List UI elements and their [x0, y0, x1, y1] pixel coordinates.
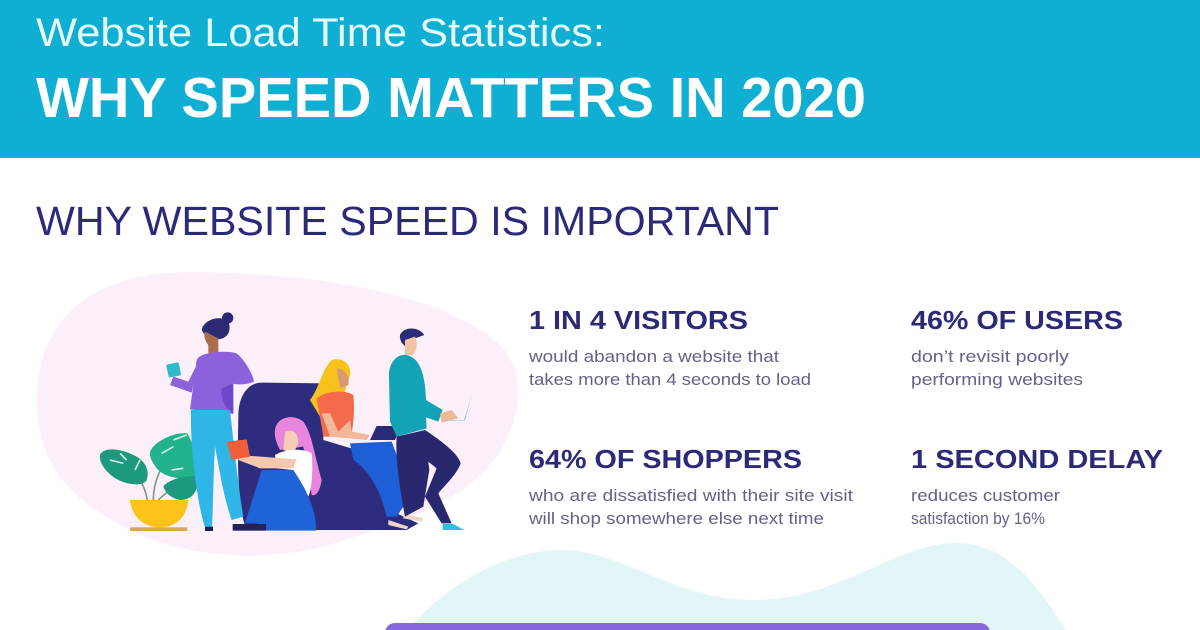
man with laptop: [389, 328, 472, 530]
stat: 1 second delay: reduces customer: [911, 486, 1060, 505]
title line 1: Website Load Time Statistics:: [36, 11, 605, 55]
sofa: [238, 383, 418, 530]
woman with laptop: [310, 359, 423, 529]
standing woman: [166, 312, 254, 531]
stat: 46% of users: performing websites: [911, 370, 1083, 389]
stat: 64% of shoppers: [528, 444, 853, 528]
pink background blob: [37, 272, 518, 555]
stat: 46% of users: 46% OF USERS: [911, 305, 1123, 335]
stat: 1 second delay: 1 SECOND DELAY: [911, 444, 1163, 474]
stat: 1 in 4 visitors: takes more than 4 seconds to load: [529, 370, 811, 389]
stat: 46% of users: don’t revisit poorly: [911, 347, 1070, 366]
title line 2: WHY SPEED MATTERS IN 2020: [36, 66, 866, 130]
seated woman with tablet: [227, 417, 322, 531]
stat: 64% of shoppers: who are dissatisfied with their site visit: [528, 486, 853, 505]
section heading: WHY WEBSITE SPEED IS IMPORTANT: [36, 198, 779, 244]
illustration: people with sofa and plant: [100, 312, 472, 531]
stat: 46% of users: [911, 305, 1123, 389]
stat: 1 in 4 visitors: would abandon a website that: [528, 347, 779, 366]
stat: 1 in 4 visitors: 1 IN 4 VISITORS: [529, 305, 748, 335]
teal background wave: [408, 543, 1066, 630]
stat: 1 in 4 visitors: [528, 305, 811, 389]
stat: 1 second delay: [911, 444, 1163, 528]
header banner: [0, 0, 1200, 158]
plant: [100, 433, 198, 531]
stat: 64% of shoppers: will shop somewhere else next time: [528, 509, 824, 528]
stat: 1 second delay: satisfaction by 16%: [911, 509, 1045, 528]
purple panel top edge: [385, 623, 990, 630]
stat: 64% of shoppers: 64% OF SHOPPERS: [529, 444, 802, 474]
